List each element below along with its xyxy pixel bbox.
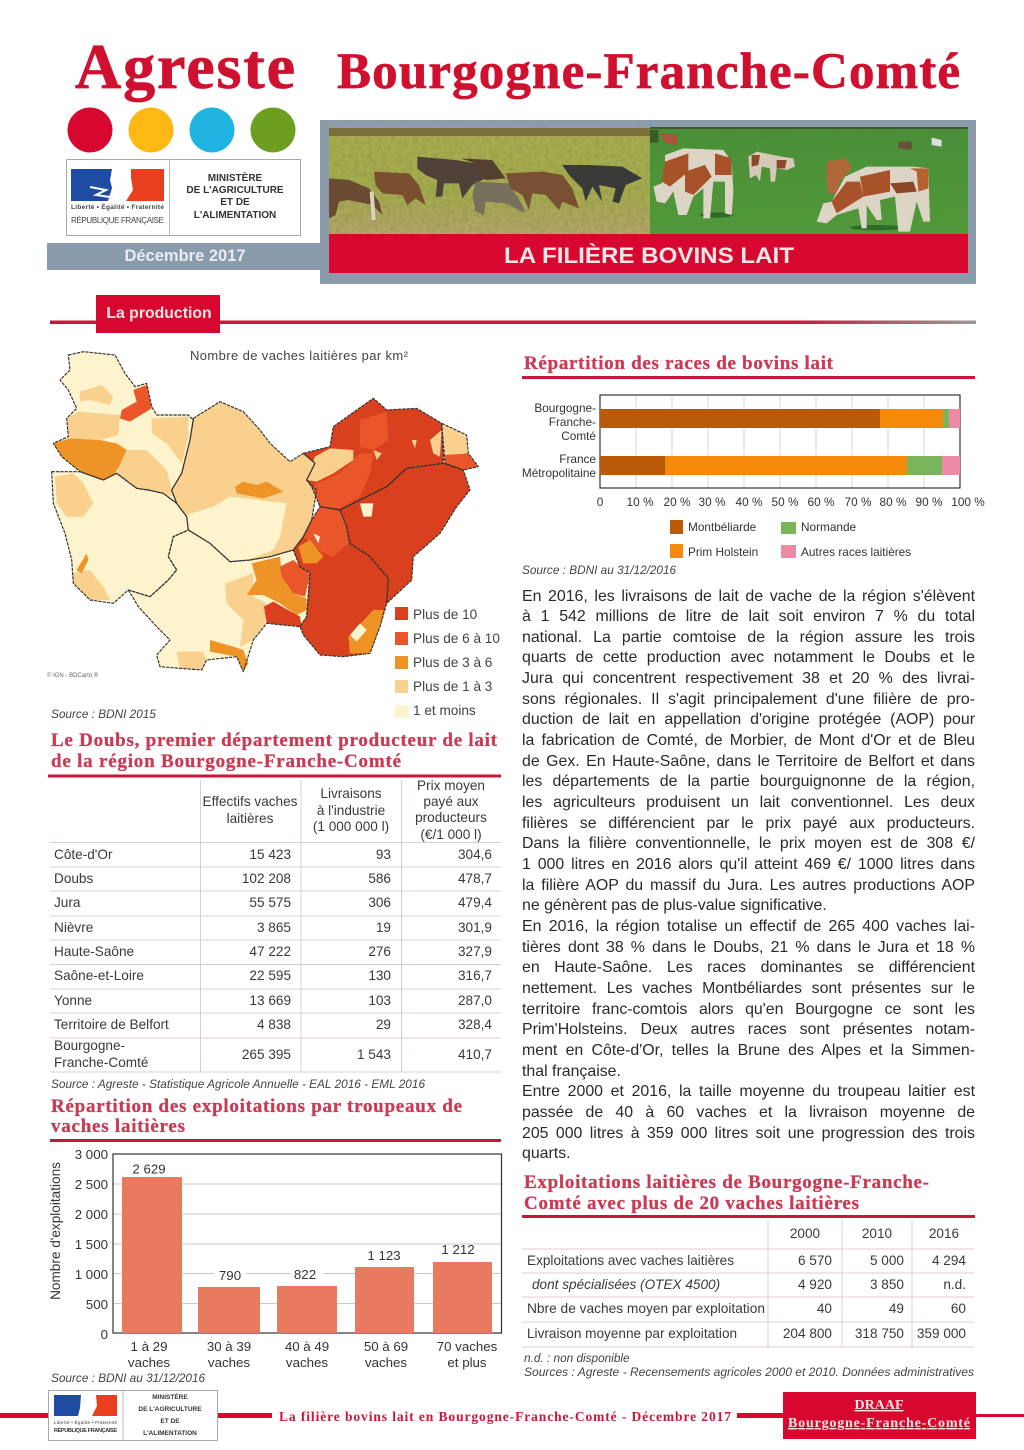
heading: Doubs table: de la région Bourgogne-Franche-Comté: [51, 751, 401, 772]
bar chart: farms by herd size: 40 à 49: [285, 1339, 329, 1354]
table: farms 2000 to 2016: 318 750: [855, 1326, 904, 1341]
table: production by department: à l'industrie: [317, 803, 385, 818]
body text: passée de 40 à 60 vaches et la livraison moyenne de: [522, 1104, 975, 1121]
body text: les agriculteurs produisent un lait conventionnel. Les deux: [522, 794, 975, 811]
body text: de Gex. En Haute-Saône, dans le Territoire de Belfort et dans: [522, 753, 975, 770]
body text: [522, 588, 975, 1162]
title: region name: Bourgogne-Franche-Comté: [337, 44, 960, 100]
heading: farms table: Comté avec plus de 20 vaches laitières: [524, 1193, 859, 1214]
table: production by department: 13 669: [249, 993, 291, 1008]
farms table notes: n.d. : non disponible: [524, 1351, 630, 1365]
section tab: La production: [96, 295, 220, 333]
DRAAF box: DRAAF: [854, 1398, 904, 1413]
table: production by department: 3 865: [257, 920, 291, 935]
bar chart source: Source : BDNI au 31/12/2016: [51, 1371, 206, 1385]
bar chart: farms by herd size: 822: [294, 1267, 316, 1282]
table: production by department: 586: [368, 871, 391, 886]
map legend: [395, 607, 500, 718]
stacked bar chart: dairy breeds: 0: [597, 495, 604, 509]
date band: [47, 243, 321, 270]
map region: Côte-d'Or: [172, 402, 317, 562]
table: farms 2000 to 2016: Exploitations avec vaches laitières: [527, 1253, 734, 1268]
table: production by department: Saône-et-Loire: [54, 968, 144, 983]
table: farms 2000 to 2016: Livraison moyenne par exploitation: [527, 1326, 737, 1341]
table: production by department: 287,0: [458, 993, 492, 1008]
table: farms 2000 to 2016: n.d.: [943, 1277, 966, 1292]
table: farms 2000 to 2016: 2016: [929, 1226, 959, 1241]
breeds legend: Montbéliarde: [688, 520, 757, 534]
bar chart: farms by herd size: 2 000: [75, 1207, 108, 1222]
bar chart: farms by herd size: 1 000: [75, 1267, 108, 1282]
stacked bar chart: dairy breeds: 20 %: [664, 495, 691, 509]
body text: En 2016, la région totalise un effectif de 265 400 vaches lai-: [522, 918, 975, 935]
logo: ministère de l'agriculture: L'ALIMENTATION: [194, 210, 276, 221]
map credit: © IGN - BDCarto ®: [47, 672, 99, 679]
footer logo: ET DE: [160, 1418, 180, 1425]
table: production by department: Côte-d'Or: [54, 847, 113, 862]
photo: herd in dry field: [329, 127, 650, 234]
heading: farms table: [522, 1172, 975, 1218]
stacked bar chart: dairy breeds: 10 %: [627, 495, 654, 509]
farms table notes: [524, 1351, 974, 1379]
bar chart: farms by herd size: 1 123: [367, 1248, 401, 1263]
body text: à 1 542 millions de litre de lait soit environ 7 % du total: [522, 608, 975, 625]
photo: Montbéliarde cows on green pasture: [650, 127, 968, 234]
icon: four coloured dots: [68, 108, 296, 152]
table: production by department: 265 395: [242, 1047, 291, 1062]
bar chart: farms by herd size: vaches: [128, 1355, 170, 1370]
body text: territoire franc-comtois alors qu'en Bourgogne ce sont les: [522, 1001, 975, 1018]
footer logo: RÉPUBLIQUE FRANÇAISE: [54, 1426, 117, 1434]
bar chart: farms by herd size: vaches: [365, 1355, 407, 1370]
table: production by department: 103: [368, 993, 391, 1008]
map legend: Plus de 1 à 3: [413, 679, 492, 694]
table: production by department: 102 208: [242, 871, 291, 886]
table: production by department: (€/1 000 l): [420, 827, 482, 842]
breeds legend: Autres races laitières: [801, 545, 911, 559]
table: production by department: Haute-Saône: [54, 944, 134, 959]
logo: ministère de l'agriculture: Liberté • Égalité • Fraternité: [71, 202, 164, 211]
footer: [0, 1390, 1024, 1440]
stacked bar chart: dairy breeds: Franche-: [549, 415, 596, 429]
body text: 1 000 litres en 2016 alors qu'il atteint 469 €/ 1000 litres dans: [522, 856, 975, 873]
logo: ministère de l'agriculture: ET DE: [220, 197, 250, 208]
map region: Jura: [293, 507, 388, 657]
footer logo: L'ALIMENTATION: [143, 1430, 197, 1437]
table: farms 2000 to 2016: 3 850: [870, 1277, 904, 1292]
table: production by department: 22 595: [249, 968, 291, 983]
body text: tières dont 38 % dans le Doubs, 21 % dans le Jura et 18 %: [522, 939, 975, 956]
map region: Doubs: [340, 463, 470, 603]
table: production by department: 478,7: [458, 871, 492, 886]
table: farms 2000 to 2016: 5 000: [870, 1253, 904, 1268]
body text: la fabrication de Comté, de Morbier, de Mont d'Or et de Bleu: [522, 732, 975, 749]
table: production by department: Franche-Comté: [54, 1055, 148, 1070]
stacked bar chart: dairy breeds: Comté: [561, 429, 596, 443]
stacked bar chart: dairy breeds: 100 %: [951, 495, 985, 509]
bar chart: farms by herd size: 2 629: [132, 1162, 166, 1176]
table: production by department: 276: [368, 944, 391, 959]
body text: ne génèrent pas de plus-value significative.: [522, 897, 827, 914]
table: production by department: Jura: [54, 895, 81, 910]
table: farms 2000 to 2016: 359 000: [917, 1326, 966, 1341]
body text: nettement. Les vaches Montbéliardes sont présentes sur le: [522, 980, 975, 997]
map region: Yonne: [53, 352, 193, 503]
footer title: La filière bovins lait en Bourgogne-Franche-Comté - Décembre 2017: [279, 1409, 731, 1424]
date band: Décembre 2017: [124, 247, 246, 265]
stacked bar chart: dairy breeds: 70 %: [845, 495, 872, 509]
body text: Prim'Holsteins. Deux autres races sont présentes notam-: [522, 1021, 975, 1038]
table: production by department: Prix moyen: [417, 778, 485, 793]
bar chart: farms by herd size: 500: [86, 1297, 108, 1312]
map region: Haute-Saône: [303, 398, 443, 510]
heading: Doubs table: Le Doubs, premier département producteur de lait: [51, 730, 498, 751]
table: production by department: 306: [368, 895, 391, 910]
table: farms 2000 to 2016: 60: [951, 1301, 966, 1316]
map legend: Plus de 6 à 10: [413, 631, 500, 646]
logo: ministère de l'agriculture: [66, 159, 300, 236]
table: production by department: Nièvre: [54, 920, 93, 935]
table: production by department: 328,4: [458, 1017, 492, 1032]
table: production by department: Territoire de Belfort: [54, 1017, 169, 1032]
bar chart: farms by herd size: 1 212: [441, 1242, 475, 1257]
table: production by department: 1 543: [357, 1047, 391, 1062]
body text: thal française.: [522, 1063, 621, 1080]
bar chart: farms by herd size: 1 500: [75, 1237, 108, 1252]
DRAAF box: Bourgogne-Franche-Comté: [788, 1416, 970, 1431]
bar chart: farms by herd size: vaches: [208, 1355, 250, 1370]
farms table notes: Sources : Agreste - Recensements agricoles 2000 et 2010. Données administratives: [524, 1365, 974, 1379]
title: Agreste: Agreste: [75, 31, 295, 102]
section tab: La production: La production: [106, 305, 212, 322]
stacked bar chart: dairy breeds: 40 %: [736, 495, 763, 509]
table: farms 2000 to 2016: 6 570: [798, 1253, 832, 1268]
table: production by department: 327,9: [458, 944, 492, 959]
heading: herd size chart: [50, 1096, 501, 1142]
table: production by department: 29: [376, 1017, 391, 1032]
stacked bar chart: dairy breeds: 50 %: [772, 495, 799, 509]
footer logo: Liberté • Égalité • Fraternité: [54, 1419, 117, 1425]
bar chart: farms by herd size: 0: [101, 1327, 108, 1342]
body text: Dans la filière conventionnelle, le prix moyen est de 308 €/: [522, 835, 975, 852]
stacked bar chart: dairy breeds: 90 %: [916, 495, 943, 509]
table: production by department: 479,4: [458, 895, 492, 910]
bar chart: farms by herd size: 30 à 39: [207, 1339, 251, 1354]
map region: Territoire de Belfort: [442, 423, 478, 470]
table: production by department: [50, 778, 501, 1072]
map title: Nombre de vaches laitières par km²: [190, 348, 409, 363]
table: production by department: 15 423: [249, 847, 291, 862]
table: production by department: 316,7: [458, 968, 492, 983]
table: farms 2000 to 2016: 4 294: [932, 1253, 966, 1268]
bar chart: farms by herd size: 50 à 69: [364, 1339, 408, 1354]
table: farms 2000 to 2016: [522, 1220, 974, 1347]
stacked bar chart: dairy breeds: 30 %: [699, 495, 726, 509]
heading: breeds chart: [522, 353, 975, 379]
footer logo: [48, 1390, 218, 1440]
table: production by department: 410,7: [458, 1047, 492, 1062]
stacked bar chart: dairy breeds: France: [559, 452, 596, 466]
breeds source: Source : BDNI au 31/12/2016: [522, 563, 677, 577]
bar chart: farms by herd size: vaches: [286, 1355, 328, 1370]
table: production by department: 93: [376, 847, 391, 862]
bar chart: farms by herd size: 790: [219, 1268, 241, 1283]
banner: photos and title: [320, 120, 976, 284]
stacked bar chart: dairy breeds: [522, 395, 985, 509]
table: farms 2000 to 2016: Nbre de vaches moyen par exploitation: [527, 1301, 765, 1316]
body text: national. La partie comtoise de la région assure les trois: [522, 629, 975, 646]
body text: les départements de la partie bourguignonne de la région,: [522, 773, 975, 790]
breeds legend: [670, 520, 911, 559]
table: farms 2000 to 2016: 4 920: [798, 1277, 832, 1292]
table: production by department: Yonne: [54, 993, 92, 1008]
heading: herd size chart: vaches laitières: [51, 1116, 185, 1137]
table: production by department: Bourgogne-: [54, 1038, 125, 1053]
table: production by department: Effectifs vaches: [203, 794, 298, 809]
stacked bar chart: dairy breeds: Bourgogne-: [534, 401, 596, 415]
table: production by department: 19: [376, 920, 391, 935]
table: production by department: 130: [368, 968, 391, 983]
table: production by department: producteurs: [415, 810, 487, 825]
map legend: 1 et moins: [413, 703, 476, 718]
body text: en Haute-Saône. Les races dominantes se différencient: [522, 959, 975, 976]
heading: farms table: Exploitations laitières de Bourgogne-Franche-: [524, 1172, 929, 1193]
table: production by department: (1 000 000 l): [313, 819, 389, 834]
map legend: Plus de 3 à 6: [413, 655, 492, 670]
body text: la filière AOP du massif du Jura. Les autres productions AOP: [522, 877, 975, 894]
DRAAF box: [783, 1392, 976, 1439]
breeds legend: Normande: [801, 520, 857, 534]
table: farms 2000 to 2016: 2010: [862, 1226, 893, 1241]
table: production by department: 4 838: [257, 1017, 291, 1032]
heading: herd size chart: Répartition des exploitations par troupeaux de: [51, 1096, 462, 1117]
map source: Source : BDNI 2015: [51, 707, 156, 721]
map region: Nièvre: [52, 472, 188, 603]
table: farms 2000 to 2016: 40: [817, 1301, 832, 1316]
body text: duction de lait en appellation d'origine protégée (AOP) pour: [522, 711, 975, 728]
table: production by department: payé aux: [423, 794, 479, 809]
banner title: [329, 234, 968, 273]
bar chart: farms by herd size: Nombre d'exploitations: [48, 1162, 63, 1300]
footer logo: MINISTÈRE: [152, 1392, 188, 1401]
table: farms 2000 to 2016: 49: [889, 1301, 904, 1316]
table: production by department: 301,9: [458, 920, 492, 935]
body text: quarts.: [522, 1145, 571, 1162]
heading: breeds chart: Répartition des races de bovins lait: [524, 353, 834, 374]
map: dairy cows per km²: [52, 352, 478, 672]
table: production by department: Livraisons: [320, 786, 382, 801]
bar chart: farms by herd size: 70 vaches: [437, 1339, 498, 1354]
map legend: Plus de 10: [413, 607, 478, 622]
stacked bar chart: dairy breeds: 80 %: [880, 495, 907, 509]
table: production by department: laitières: [227, 811, 274, 826]
body text: Jura qui concentrent respectivement 38 et 20 % des livrai-: [522, 670, 975, 687]
table: production by department: 304,6: [458, 847, 492, 862]
body text: En 2016, les livraisons de lait de vache de la région s'élèvent: [522, 588, 975, 604]
bar chart: farms by herd size: [48, 1147, 502, 1370]
body text: quarts de cette production avec notamment le Doubs et le: [522, 649, 975, 666]
banner title: LA FILIÈRE BOVINS LAIT: [504, 243, 794, 268]
logo: ministère de l'agriculture: MINISTÈRE: [208, 171, 263, 184]
heading: Doubs table: [48, 730, 501, 778]
bar chart: farms by herd size: 1 à 29: [131, 1339, 167, 1354]
body text: 205 000 litres à 359 000 litres soit une progression des trois: [522, 1125, 975, 1142]
table: farms 2000 to 2016: 2000: [790, 1226, 821, 1241]
logo: ministère de l'agriculture: DE L'AGRICULTURE: [186, 185, 284, 196]
table source: Source : Agreste - Statistique Agricole Annuelle - EAL 2016 - EML 2016: [51, 1077, 425, 1091]
stacked bar chart: dairy breeds: Métropolitaine: [522, 466, 596, 480]
bar chart: farms by herd size: 3 000: [75, 1147, 108, 1162]
body text: sons régionales. Il s'agit principalement d'une filière de pro-: [522, 691, 975, 708]
table: farms 2000 to 2016: 204 800: [783, 1326, 832, 1341]
map region: Saône-et-Loire: [128, 530, 310, 672]
breeds legend: Prim Holstein: [688, 545, 758, 559]
stacked bar chart: dairy breeds: 60 %: [808, 495, 835, 509]
table: production by department: Doubs: [54, 871, 93, 886]
table: production by department: 47 222: [249, 944, 291, 959]
bar chart: farms by herd size: 2 500: [75, 1177, 108, 1192]
body text: Entre 2000 et 2016, la taille moyenne du troupeau laitier est: [522, 1083, 975, 1100]
bar chart: farms by herd size: et plus: [447, 1355, 487, 1370]
table: farms 2000 to 2016: dont spécialisées (OTEX 4500): [532, 1277, 720, 1292]
table: production by department: 55 575: [249, 895, 291, 910]
logo: ministère de l'agriculture: RÉPUBLIQUE FRANÇAISE: [71, 216, 164, 225]
footer logo: DE L'AGRICULTURE: [138, 1406, 202, 1413]
body text: filières se différencient par le prix payé aux producteurs.: [522, 815, 975, 832]
body text: ment en Côte-d'Or, telles la Brune des Alpes et la Simmen-: [522, 1042, 975, 1059]
